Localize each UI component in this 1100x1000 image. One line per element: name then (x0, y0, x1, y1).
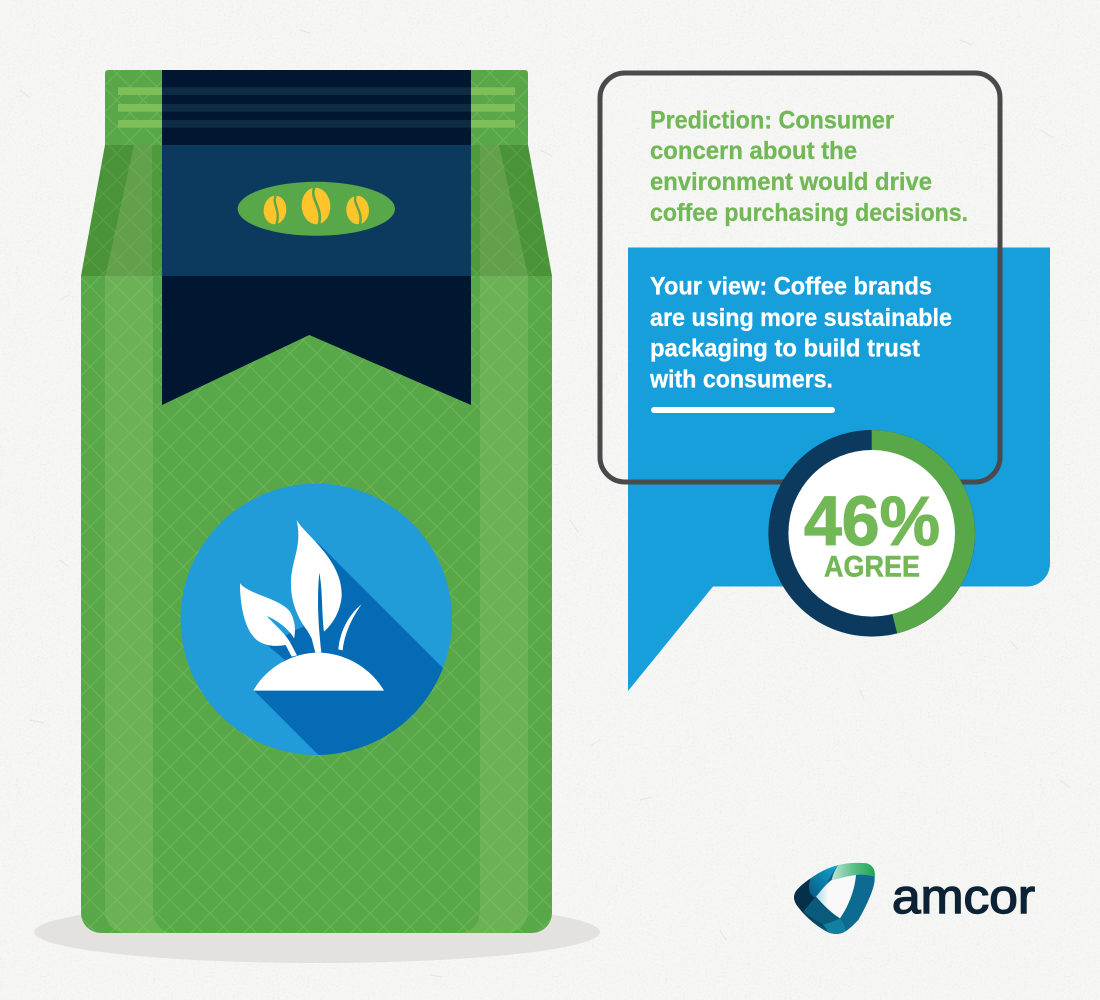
donut chart 46 percent (768, 430, 975, 637)
coffee bean badge (238, 182, 395, 236)
percent value: 46% (804, 482, 940, 560)
prediction text (650, 106, 968, 227)
bag gusset (81, 145, 552, 276)
your view text: Your view: Coffee brands (650, 272, 932, 300)
amcor logo (794, 863, 1035, 934)
speech bubble (628, 248, 1050, 691)
your view text: with consumers. (649, 366, 833, 394)
sprout icon circle (180, 484, 452, 755)
right light panel (459, 276, 528, 933)
diamond grid overlay (81, 70, 552, 933)
flap seal stripes (118, 87, 515, 128)
prediction text: concern about the (650, 137, 857, 165)
prediction text: coffee purchasing decisions. (650, 199, 968, 227)
bag body (81, 276, 552, 933)
long shadow (254, 542, 443, 755)
logo mark (794, 863, 875, 934)
sprout plant (240, 520, 384, 691)
ground shadow under bag (34, 901, 600, 963)
prediction text: Prediction: Consumer (650, 106, 894, 134)
ribbon seal stripes (162, 87, 471, 128)
your view text: are using more sustainable (650, 304, 952, 332)
rounded outline box (600, 73, 1000, 482)
navy ribbon (162, 70, 471, 405)
left light panel (105, 276, 174, 933)
ribbon label panel (162, 145, 471, 276)
your view text: packaging to build trust (650, 335, 921, 363)
coffee bag (81, 70, 552, 933)
underline rule (651, 407, 835, 413)
prediction text: environment would drive (650, 168, 932, 196)
logo wordmark: amcor (892, 871, 1035, 924)
bag top flap (105, 70, 528, 145)
agree label: AGREE (824, 551, 920, 584)
your view text (649, 272, 952, 394)
